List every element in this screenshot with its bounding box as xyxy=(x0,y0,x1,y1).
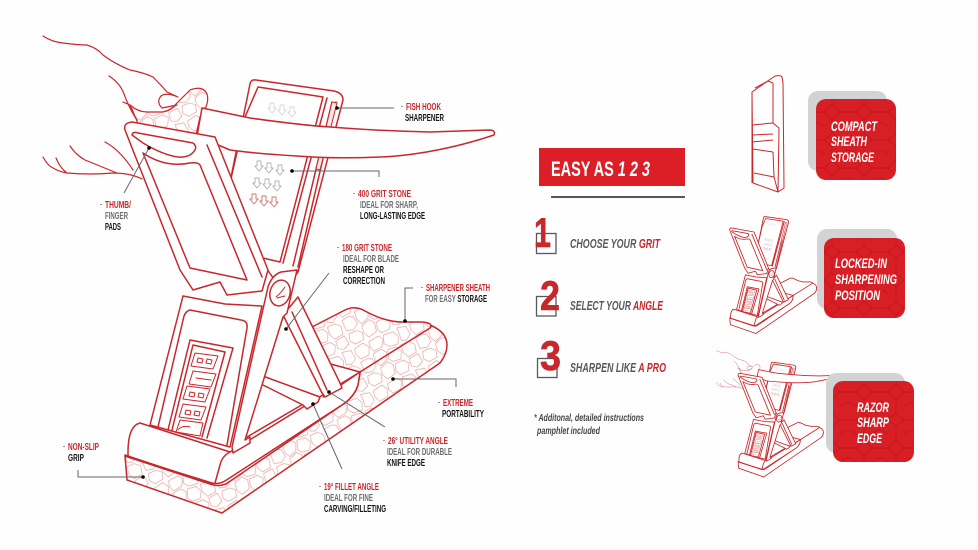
footnote xyxy=(534,413,644,437)
hand holding knife xyxy=(43,36,494,179)
card: compact sheath storage: STORAGE xyxy=(831,149,874,165)
label: 26 degree utility angle xyxy=(383,436,452,469)
label: 19 degree fillet angle xyxy=(319,482,386,515)
label: extreme portability xyxy=(438,398,484,420)
label: 400 grit stone: LONG-LASTING EDGE xyxy=(360,211,425,222)
label: 180 grit stone: IDEAL FOR BLADE xyxy=(343,254,399,265)
front 180 grit panel with handle xyxy=(125,122,268,295)
card: razor sharp edge: RAZOR xyxy=(857,399,890,415)
label: 26 degree utility angle: KNIFE EDGE xyxy=(387,458,425,469)
card: locked-in sharpening position xyxy=(817,229,905,318)
label: sharpener sheath: SHARPENER SHEATH xyxy=(426,283,490,294)
step 2: select your angle: SELECT YOUR ANGLE xyxy=(570,298,663,313)
label: sharpener sheath xyxy=(421,283,490,305)
card: compact sheath storage: COMPACT xyxy=(831,118,878,134)
base tray xyxy=(128,372,360,484)
step 3: sharpen like a pro: 3 xyxy=(540,332,561,379)
label: thumb finger pads xyxy=(100,200,131,233)
stone textured side of base xyxy=(125,325,447,513)
rear 400 grit stone panel xyxy=(228,80,343,292)
label: 400 grit stone: 400 GRIT STONE xyxy=(358,189,411,200)
digital stone grit rows xyxy=(176,353,218,436)
label: 400 grit stone xyxy=(353,189,425,222)
label: non-slip grip: NON-SLIP xyxy=(68,442,99,453)
card: razor sharp edge: EDGE xyxy=(857,430,882,446)
step 2: select your angle xyxy=(536,272,663,319)
stand leg and foot xyxy=(232,270,297,453)
label: fish hook sharpener xyxy=(401,102,444,124)
icon: stand locked open xyxy=(730,217,817,334)
icon: sharpening with knife in hand xyxy=(716,351,836,477)
card: compact sheath storage xyxy=(808,91,896,180)
cross brace xyxy=(257,375,320,409)
heading banner: easy as 1 2 3: EASY AS 1 2 3 xyxy=(551,158,650,181)
label: thumb finger pads: THUMB/ xyxy=(105,200,131,211)
footnote: pamphlet included xyxy=(536,426,601,437)
card: locked-in sharpening position: SHARPENING xyxy=(835,271,897,287)
label: 180 grit stone xyxy=(337,243,399,287)
label: 180 grit stone: RESHAPE OR xyxy=(343,265,384,276)
label: sharpener sheath: FOR EASY STORAGE xyxy=(425,294,487,305)
step 3: sharpen like a pro xyxy=(538,332,666,379)
label: 400 grit stone: IDEAL FOR SHARP, xyxy=(360,200,418,211)
label: extreme portability: EXTREME xyxy=(443,398,473,409)
folding stand and base xyxy=(125,122,447,513)
card: razor sharp edge xyxy=(826,373,914,462)
step 3: sharpen like a pro: SHARPEN LIKE A PRO xyxy=(570,360,666,375)
lower panel xyxy=(150,296,262,447)
label: thumb finger pads: FINGER xyxy=(105,211,128,222)
label: fish hook sharpener: SHARPENER xyxy=(405,113,444,124)
label: 26 degree utility angle: 26° UTILITY ANGLE xyxy=(388,436,448,447)
stone textured top of sheath xyxy=(312,308,431,372)
pivot hinge xyxy=(267,278,293,308)
label: extreme portability: PORTABILITY xyxy=(442,409,484,420)
step 1: choose your grit: 1 xyxy=(534,209,551,256)
main sharpener illustration xyxy=(43,36,494,513)
knife blade xyxy=(197,108,494,158)
label: 19 degree fillet angle: CARVING/FILLETING xyxy=(324,504,386,515)
icon: folded sheath xyxy=(752,76,784,192)
label: 19 degree fillet angle: IDEAL FOR FINE xyxy=(324,493,373,504)
step 1: choose your grit: CHOOSE YOUR GRIT xyxy=(570,236,661,251)
footnote: * Additonal, detailed instructions xyxy=(534,413,644,424)
label: non-slip grip: GRIP xyxy=(68,453,84,464)
label: thumb finger pads: PADS xyxy=(105,222,121,233)
rear strut xyxy=(283,297,342,397)
heading banner: easy as 1 2 3 xyxy=(539,148,685,186)
label: non-slip grip xyxy=(63,442,99,464)
label: fish hook sharpener: FISH HOOK xyxy=(406,102,441,113)
step 2: select your angle: 2 xyxy=(540,272,560,319)
card: locked-in sharpening position: LOCKED-IN xyxy=(835,255,888,271)
label: 180 grit stone: CORRECTION xyxy=(343,276,385,287)
card: locked-in sharpening position: POSITION xyxy=(835,287,881,303)
step 1: choose your grit xyxy=(534,209,661,256)
label: 19 degree fillet angle: 19° FILLET ANGLE xyxy=(324,482,379,493)
card: razor sharp edge: SHARP xyxy=(857,414,889,430)
label: 26 degree utility angle: IDEAL FOR DURABLE xyxy=(387,447,452,458)
leader lines and dots xyxy=(78,106,456,479)
label: 180 grit stone: 180 GRIT STONE xyxy=(342,243,392,254)
card: compact sheath storage: SHEATH xyxy=(831,133,868,149)
